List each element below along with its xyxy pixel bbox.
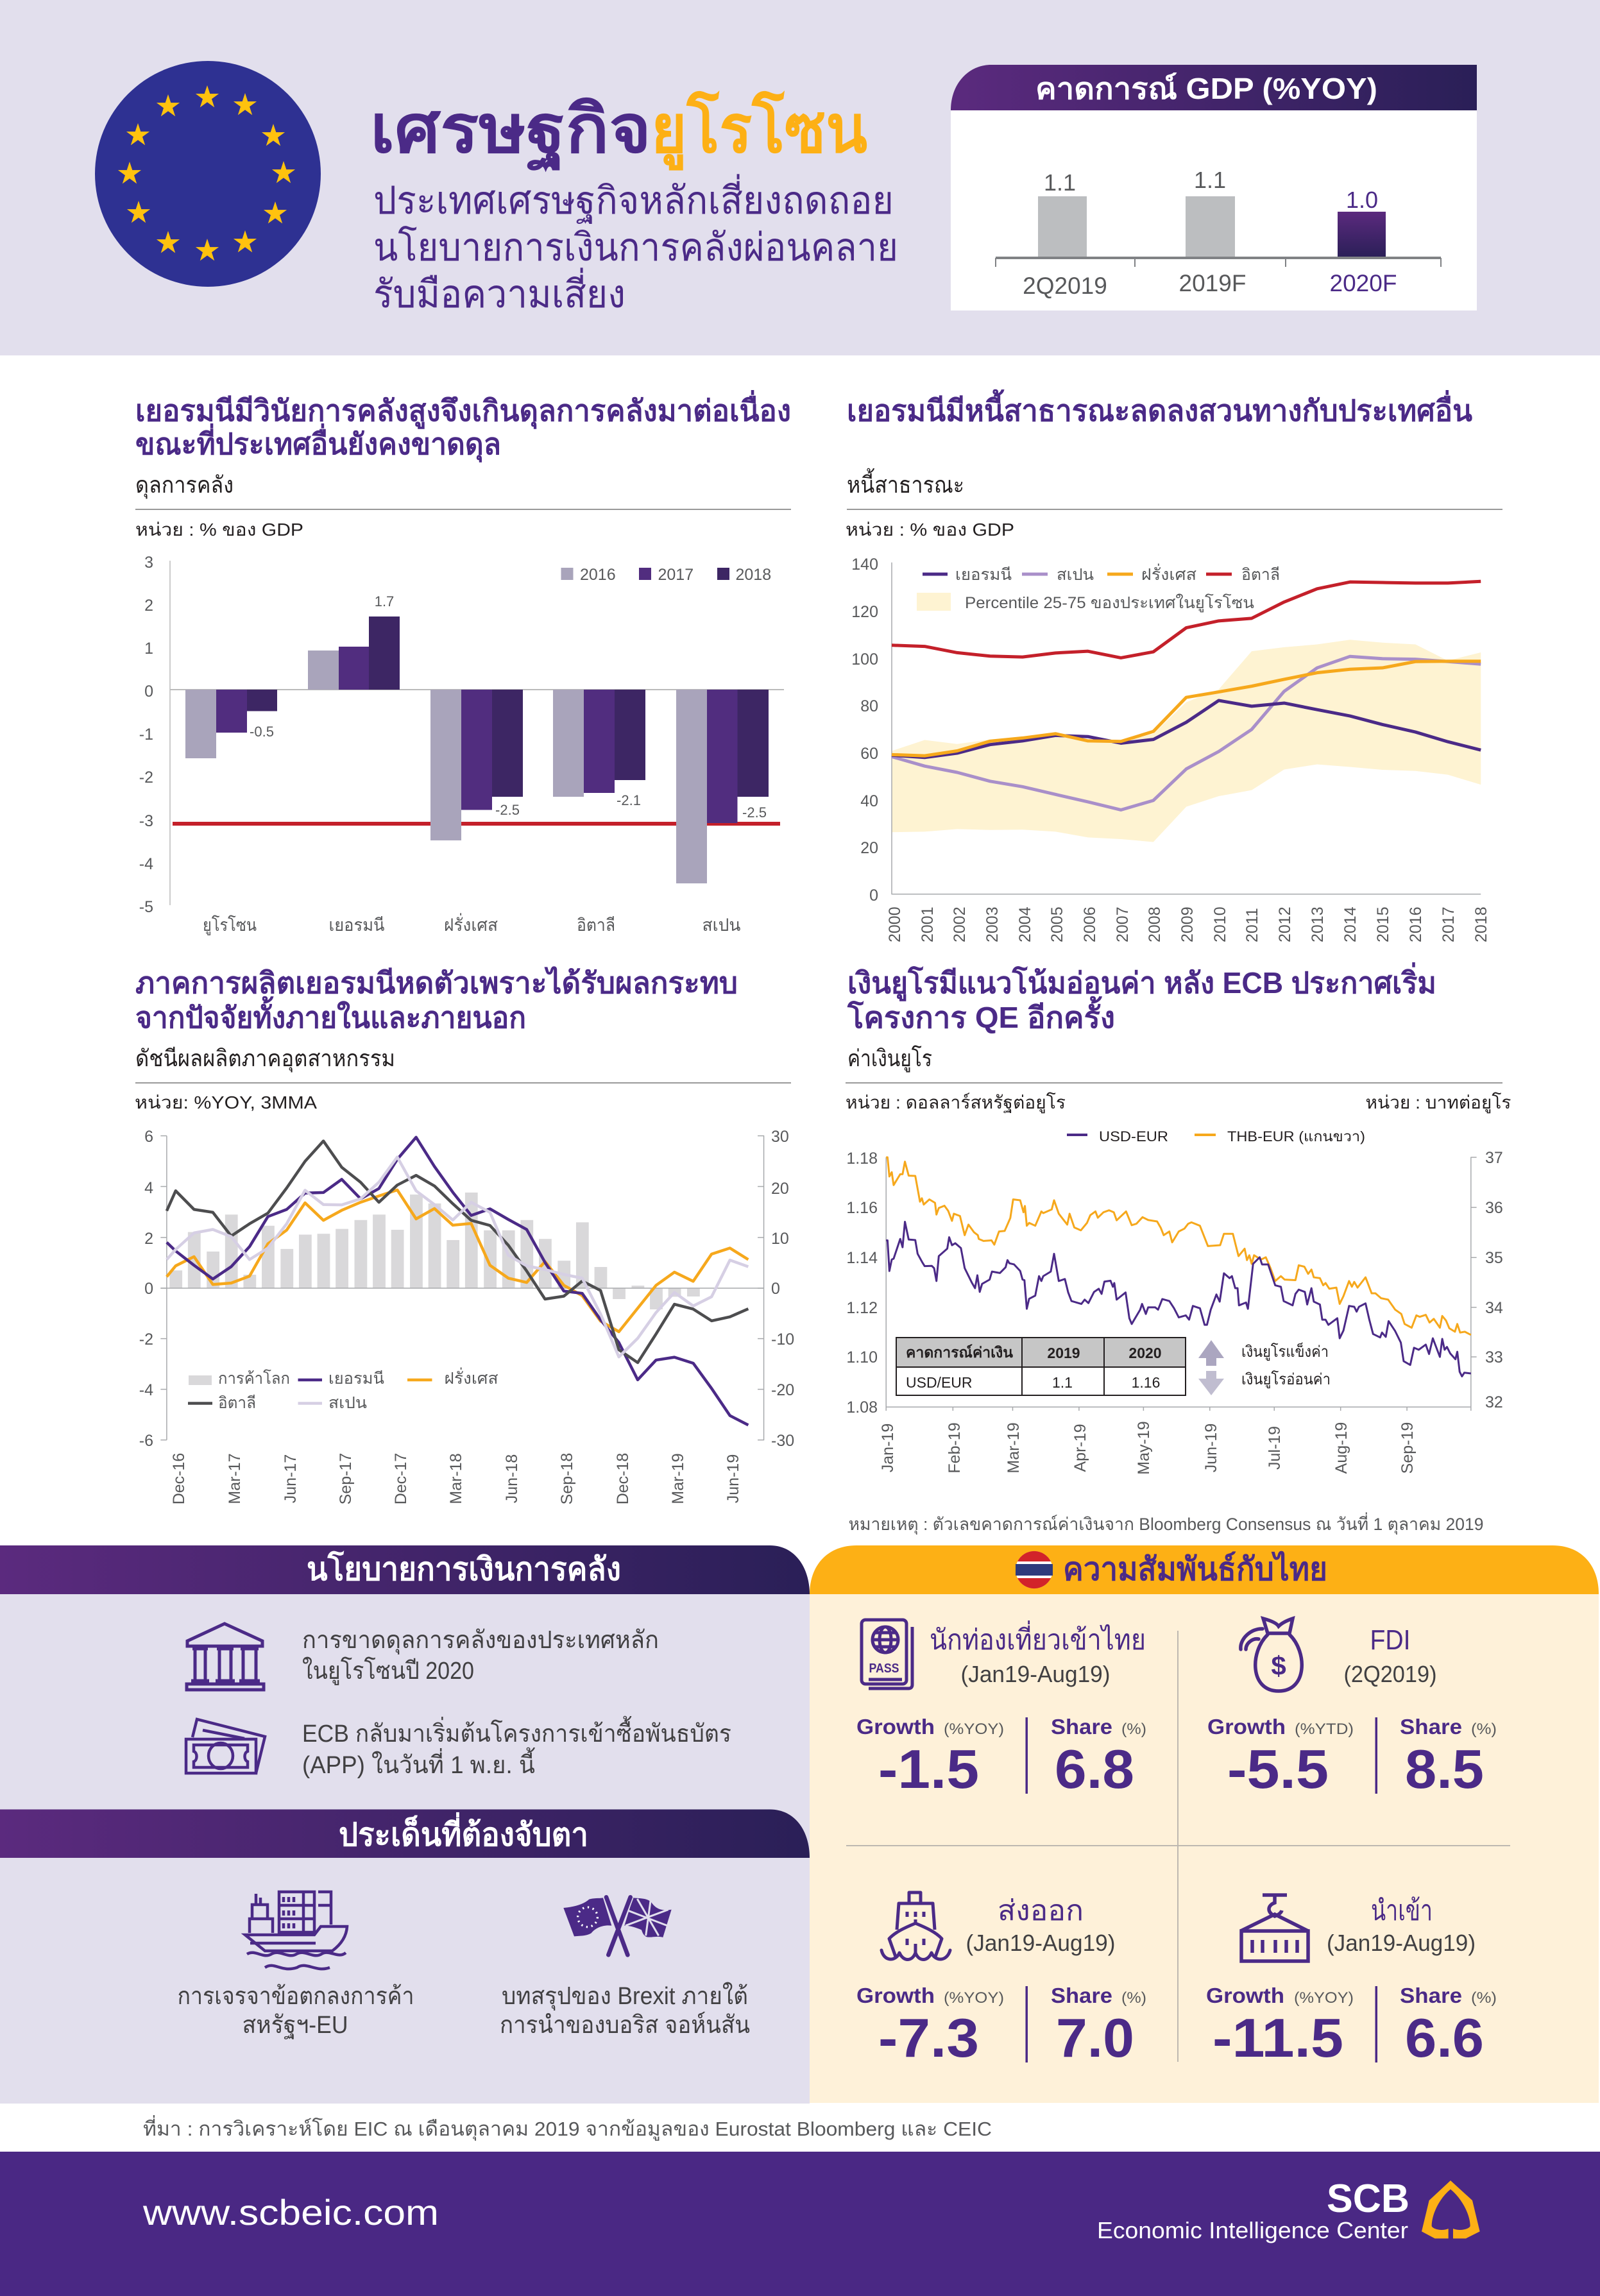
table: currency forecast: 2020: [1128, 1345, 1162, 1361]
line chart: public debt: 2006: [1081, 906, 1099, 942]
line chart: exchange rates: Apr-19: [1071, 1424, 1089, 1472]
line chart: public debt: 2003: [983, 906, 1001, 942]
table: currency forecast: [896, 1338, 1186, 1395]
icon: passport: PASS: [869, 1662, 899, 1676]
subtitle: รับมือความเสี่ยง: [373, 268, 626, 316]
stat: FDI: (%): [1471, 1721, 1497, 1738]
bar chart: GDP: 2019F: [1179, 270, 1246, 296]
bar chart: fiscal balance: ฝรั่งเศส: [444, 913, 498, 935]
bar chart: fiscal balance: -1: [139, 726, 153, 744]
table: currency forecast: 1.1: [1052, 1374, 1073, 1391]
legend: [561, 566, 771, 584]
panel: monetary and fiscal policy: นโยบายการเงินการคลัง: [307, 1550, 621, 1587]
line chart: exchange rates: 35: [1485, 1249, 1503, 1267]
panel: monetary and fiscal policy: (APP) ในวันที่ 1 พ.ย. นี้: [302, 1747, 536, 1779]
heading: industrial production: [135, 966, 738, 1034]
stat: imports: [1206, 1895, 1497, 2069]
legend: การค้าโลก: [218, 1369, 290, 1388]
source note: ที่มา : การวิเคราะห์โดย EIC ณ เดือนตุลาคม 2019 จากข้อมูลของ Eurostat Bloomberg และ CEIC: [143, 2115, 992, 2141]
line chart: public debt: 0: [869, 887, 878, 905]
panel: monetary and fiscal policy: [0, 1545, 810, 2104]
heading: euro exchange rate: โครงการ QE อีกครั้ง: [847, 996, 1115, 1034]
legend: [188, 1367, 498, 1412]
line chart: exchange rates: 33: [1485, 1348, 1503, 1366]
combo chart: industrial production: 0: [144, 1280, 153, 1298]
legend: เยอรมนี: [955, 566, 1012, 584]
stat: FDI: (%YTD): [1295, 1721, 1354, 1738]
combo chart: industrial production: Dec-17: [392, 1453, 410, 1504]
combo chart: industrial production: 10: [771, 1230, 789, 1248]
panel: fiscal balance: [135, 390, 791, 935]
bar chart: GDP: 1.1: [1194, 167, 1226, 193]
icon: passport: [862, 1620, 912, 1688]
line chart: public debt: 2018: [1472, 906, 1490, 942]
combo chart: industrial production: Dec-16: [170, 1453, 188, 1504]
line chart: public debt: 2005: [1048, 906, 1066, 942]
bar chart: GDP: [996, 167, 1441, 299]
panel: euro exchange rate: หน่วย : บาทต่อยูโร: [1365, 1092, 1511, 1114]
heading: fiscal balance: [135, 390, 791, 463]
bar chart: fiscal balance: -0.5: [250, 724, 274, 740]
panel: GDP forecast: คาดการณ์ GDP (%YOY): [1035, 72, 1377, 105]
line chart: exchange rates: 34: [1485, 1299, 1503, 1317]
stat: imports: Share: [1400, 1984, 1462, 2007]
icon: down arrow: [1198, 1371, 1224, 1395]
stat: FDI: (2Q2019): [1343, 1661, 1437, 1687]
bar chart: fiscal balance: -2.1: [617, 792, 641, 808]
legend: อิตาลี: [218, 1394, 256, 1412]
footer band: www.scbeic.com: [142, 2192, 439, 2232]
heading: fiscal balance: ขณะที่ประเทศอื่นยังคงขาดดุล: [135, 423, 501, 463]
panel: euro exchange rate: [846, 962, 1511, 1535]
stat: FDI: Share: [1400, 1715, 1462, 1739]
legend: Percentile 25-75 ของประเทศในยูโรโซน: [965, 593, 1254, 613]
stat: exports: Share: [1051, 1984, 1112, 2007]
legend: 2018: [735, 566, 771, 584]
line chart: public debt: 2017: [1440, 906, 1458, 942]
legend: อิตาลี: [1241, 566, 1280, 584]
line chart: exchange rates: Feb-19: [946, 1422, 964, 1474]
line chart: public debt: 2007: [1114, 906, 1132, 942]
line chart: exchange rates: Jan-19: [879, 1424, 897, 1472]
line chart: public debt: 2002: [951, 906, 969, 942]
panel: industrial production: ดัชนีผลผลิตภาคอุตสาหกรรม: [135, 1045, 395, 1073]
panel: watch list: บทสรุปของ Brexit ภายใต้: [502, 1982, 748, 2011]
stat: tourists: Growth: [856, 1715, 935, 1739]
line chart: public debt: 2004: [1016, 906, 1034, 942]
line chart: public debt: 140: [851, 556, 878, 574]
footer band: [0, 2152, 1600, 2296]
line chart: exchange rates: 1.08: [846, 1399, 878, 1416]
stat: exports: (%YOY): [944, 1989, 1004, 2007]
stat: imports: นำเข้า: [1371, 1895, 1433, 1926]
bar chart: fiscal balance: -4: [139, 855, 153, 873]
legend: ฝรั่งเศส: [1141, 563, 1196, 584]
stat: imports: (%): [1471, 1989, 1497, 2007]
stat: imports: 6.6: [1405, 2008, 1484, 2069]
combo chart: industrial production: -20: [771, 1381, 794, 1399]
legend: [1067, 1128, 1365, 1144]
bar chart: fiscal balance: เยอรมนี: [328, 915, 385, 935]
icon: cruise ship: [881, 1892, 950, 1959]
combo chart: industrial production: 4: [144, 1179, 153, 1197]
icon: up arrow: [1198, 1340, 1224, 1366]
panel: watch list: การนำของบอริส จอห์นสัน: [500, 2011, 750, 2039]
line chart: exchange rates: Mar-19: [1005, 1422, 1023, 1474]
combo chart: industrial production: -2: [139, 1331, 153, 1348]
combo chart: industrial production: 0: [771, 1280, 780, 1298]
legend: THB-EUR (แกนขวา): [1227, 1128, 1365, 1144]
combo chart: industrial production: 30: [771, 1128, 789, 1146]
stat: FDI: 8.5: [1405, 1739, 1484, 1800]
stat: imports: (Jan19-Aug19): [1327, 1930, 1476, 1956]
combo chart: industrial production: Sep-18: [558, 1453, 576, 1504]
header band: [0, 0, 1600, 355]
bar chart: fiscal balance: 0: [144, 683, 153, 701]
stat: exports: -7.3: [878, 2008, 979, 2069]
panel: watch list: ประเด็นที่ต้องจับตา: [339, 1812, 588, 1853]
stat: FDI: FDI: [1370, 1624, 1410, 1656]
heading: industrial production: จากปัจจัยทั้งภายในและภายนอก: [135, 996, 526, 1034]
panel: watch list: [0, 1809, 810, 2039]
line chart: public debt: 120: [851, 603, 878, 621]
logo: SCB: [1097, 2177, 1480, 2243]
stat: tourists: (Jan19-Aug19): [961, 1661, 1110, 1687]
combo chart: industrial production: 20: [771, 1180, 789, 1198]
legend: สเปน: [1057, 566, 1094, 584]
legend: 2016: [580, 566, 616, 584]
bar chart: fiscal balance: [139, 554, 784, 935]
combo chart: industrial production: -6: [139, 1432, 153, 1450]
line chart: public debt: 2010: [1211, 906, 1229, 942]
line chart: public debt: 2014: [1341, 906, 1359, 942]
stat: exports: [856, 1892, 1146, 2069]
stat: imports: -11.5: [1213, 2008, 1343, 2069]
legend: สเปน: [328, 1394, 367, 1412]
line chart: public debt: 80: [860, 697, 878, 715]
panel: monetary and fiscal policy: การขาดดุลการคลังของประเทศหลัก: [302, 1627, 659, 1654]
bar chart: fiscal balance: -2.5: [742, 804, 767, 821]
line chart: public debt: 2000: [886, 906, 904, 942]
line chart: exchange rates: Sep-19: [1399, 1422, 1417, 1474]
subtitle: นโยบายการเงินการคลังผ่อนคลาย: [373, 225, 898, 269]
combo chart: industrial production: 6: [144, 1128, 153, 1146]
line chart: public debt: 20: [860, 839, 878, 857]
heading: industrial production: ภาคการผลิตเยอรมนีหดตัวเพราะได้รับผลกระทบ: [135, 966, 738, 999]
bar chart: GDP: 1.1: [1044, 169, 1076, 196]
legend: 2017: [658, 566, 694, 584]
line chart: public debt: 2001: [919, 906, 937, 942]
subtitle: ประเทศเศรษฐกิจหลักเสี่ยงถดถอย: [373, 174, 894, 224]
line chart: exchange rates: 1.16: [846, 1199, 878, 1217]
stat: imports: (%YOY): [1294, 1989, 1354, 2007]
title: ยูโรโซน: [651, 90, 867, 171]
stat: FDI: [1207, 1619, 1497, 1800]
bar chart: fiscal balance: สเปน: [702, 915, 740, 935]
bar chart: GDP: 1.0: [1346, 187, 1378, 213]
stat: exports: Growth: [856, 1984, 935, 2007]
bar chart: fiscal balance: -5: [139, 898, 153, 916]
icon: Thai flag: [1016, 1551, 1053, 1588]
stat: exports: 7.0: [1056, 2008, 1134, 2069]
combo chart: industrial production: 2: [144, 1230, 153, 1248]
icon: container ship: [245, 1892, 347, 1969]
combo chart: industrial production: -10: [771, 1331, 794, 1348]
panel: GDP forecast: [951, 65, 1477, 310]
logo: SCB: Economic Intelligence Center: [1097, 2217, 1408, 2243]
line chart: exchange rates: 1.12: [846, 1299, 878, 1317]
bar chart: fiscal balance: 1.7: [375, 593, 394, 609]
legend: [917, 563, 1280, 613]
legend: เยอรมนี: [328, 1370, 384, 1388]
title: [370, 90, 867, 173]
panel: industrial production: [135, 966, 794, 1504]
icon: bank: [187, 1624, 264, 1690]
bar chart: GDP: 2020F: [1330, 270, 1397, 296]
line chart: public debt: 100: [851, 651, 878, 668]
table: currency forecast: 2019: [1047, 1345, 1080, 1361]
panel: fiscal balance: ดุลการคลัง: [135, 472, 234, 499]
line chart: exchange rates: 1.10: [846, 1348, 878, 1366]
line chart: public debt: 2009: [1179, 906, 1196, 942]
heading: euro exchange rate: เงินยูโรมีแนวโน้มอ่อนค่า หลัง ECB ประกาศเริ่ม: [847, 962, 1436, 1001]
stat: exports: (Jan19-Aug19): [966, 1930, 1115, 1956]
line chart: exchange rates: 37: [1485, 1149, 1503, 1167]
panel: euro exchange rate: หมายเหตุ : ตัวเลขคาดการณ์ค่าเงินจาก Bloomberg Consensus ณ วันที่ 1 ตุลาคม 2019: [848, 1512, 1483, 1535]
logo: SCB: SCB: [1327, 2177, 1409, 2221]
panel: watch list: สหรัฐฯ-EU: [243, 2012, 348, 2039]
icon: money bag: $: [1271, 1651, 1286, 1681]
icon: hanging container: [1241, 1895, 1308, 1961]
panel: monetary and fiscal policy: ECB กลับมาเริ่มต้นโครงการเข้าซื้อพันธบัตร: [302, 1715, 731, 1748]
line chart: public debt: 2011: [1243, 908, 1261, 942]
panel: public debt: หนี้สาธารณะ: [847, 468, 964, 498]
line chart: public debt: 2013: [1309, 906, 1327, 942]
legend: ฝรั่งเศส: [444, 1367, 498, 1388]
combo chart: industrial production: [139, 1128, 794, 1504]
stat: imports: Growth: [1206, 1984, 1284, 2007]
combo chart: industrial production: Jun-19: [724, 1454, 742, 1503]
line chart: public debt: [851, 556, 1490, 942]
title: เศรษฐกิจ: [370, 92, 651, 173]
line chart: exchange rates: [846, 1149, 1503, 1475]
panel: relationship with Thailand: ความสัมพันธ์กับไทย: [1063, 1551, 1327, 1587]
panel: watch list: การเจรจาข้อตกลงการค้า: [177, 1983, 414, 2010]
bar chart: fiscal balance: -2.5: [495, 802, 520, 818]
panel: euro exchange rate: ค่าเงินยูโร: [847, 1045, 932, 1073]
legend: USD-EUR: [1099, 1128, 1168, 1144]
combo chart: industrial production: Sep-17: [337, 1453, 355, 1504]
bar chart: fiscal balance: 3: [144, 554, 153, 572]
line chart: public debt: 2012: [1276, 906, 1294, 942]
stat: tourists: นักท่องเที่ยวเข้าไทย: [930, 1620, 1146, 1656]
line chart: public debt: 40: [860, 792, 878, 810]
table: currency forecast: 1.16: [1132, 1374, 1160, 1391]
bar chart: fiscal balance: -3: [139, 812, 153, 830]
line chart: exchange rates: Jul-19: [1266, 1426, 1284, 1470]
stat: exports: ส่งออก: [998, 1895, 1084, 1926]
line chart: exchange rates: เงินยูโรอ่อนค่า: [1241, 1370, 1331, 1389]
line chart: exchange rates: 32: [1485, 1393, 1503, 1411]
icon: banknotes: [186, 1719, 265, 1773]
panel: fiscal balance: หน่วย : % ของ GDP: [135, 520, 303, 540]
line chart: public debt: 2015: [1374, 906, 1392, 942]
stat: tourists: Share: [1051, 1715, 1112, 1739]
combo chart: industrial production: Mar-18: [447, 1453, 465, 1504]
panel: public debt: [846, 389, 1502, 942]
line chart: exchange rates: เงินยูโรแข็งค่า: [1241, 1342, 1329, 1361]
line chart: exchange rates: Aug-19: [1332, 1422, 1350, 1474]
combo chart: industrial production: Mar-19: [669, 1453, 687, 1504]
panel: relationship with Thailand: [810, 1545, 1599, 2103]
line chart: exchange rates: 36: [1485, 1199, 1503, 1217]
line chart: exchange rates: May-19: [1135, 1421, 1153, 1475]
bar chart: fiscal balance: ยูโรโซน: [203, 915, 257, 935]
bar chart: fiscal balance: -2: [139, 769, 153, 787]
line chart: exchange rates: Jun-19: [1202, 1424, 1220, 1472]
combo chart: industrial production: Mar-17: [226, 1453, 244, 1504]
stat: tourists: (%YOY): [944, 1721, 1004, 1738]
stat: tourists: 6.8: [1055, 1739, 1134, 1800]
combo chart: industrial production: Jun-18: [503, 1454, 521, 1503]
stat: tourists: [856, 1620, 1146, 1800]
bar chart: fiscal balance: อิตาลี: [577, 915, 615, 935]
panel: monetary and fiscal policy: ในยูโรโซนปี 2020: [302, 1656, 474, 1685]
bar chart: GDP: 2Q2019: [1023, 273, 1107, 299]
icon: money bag: [1241, 1619, 1302, 1691]
panel: euro exchange rate: หน่วย : ดอลลาร์สหรัฐต่อยูโร: [846, 1092, 1066, 1114]
icon: EU and UK flags: [563, 1897, 672, 1955]
line chart: exchange rates: 1.18: [846, 1150, 878, 1168]
stat: FDI: -5.5: [1227, 1739, 1329, 1800]
bar chart: fiscal balance: 1: [144, 640, 153, 658]
stat: FDI: Growth: [1207, 1715, 1286, 1739]
line chart: public debt: 2016: [1407, 906, 1425, 942]
panel: industrial production: หน่วย: %YOY, 3MMA: [135, 1093, 317, 1112]
line chart: public debt: 2008: [1146, 906, 1164, 942]
line chart: exchange rates: 1.14: [846, 1249, 878, 1267]
heading: euro exchange rate: [847, 962, 1436, 1034]
combo chart: industrial production: Dec-18: [614, 1453, 632, 1504]
table: currency forecast: USD/EUR: [906, 1374, 973, 1391]
combo chart: industrial production: -4: [139, 1381, 153, 1399]
stat: exports: (%): [1121, 1989, 1146, 2007]
line chart: public debt: 60: [860, 745, 878, 763]
panel: public debt: เยอรมนีมีหนี้สาธารณะลดลงสวนทางกับประเทศอื่น: [847, 389, 1473, 427]
combo chart: industrial production: Jun-17: [282, 1454, 300, 1503]
subtitle: [373, 174, 898, 316]
icon: EU flag circle: [95, 61, 321, 287]
table: currency forecast: คาดการณ์ค่าเงิน: [906, 1344, 1013, 1361]
panel: public debt: หน่วย : % ของ GDP: [846, 520, 1014, 540]
stat: tourists: -1.5: [878, 1739, 979, 1800]
bar chart: fiscal balance: 2: [144, 597, 153, 615]
heading: fiscal balance: เยอรมนีมีวินัยการคลังสูงจึงเกินดุลการคลังมาต่อเนื่อง: [135, 390, 791, 429]
stat: tourists: (%): [1121, 1721, 1146, 1738]
combo chart: industrial production: -30: [771, 1432, 794, 1450]
